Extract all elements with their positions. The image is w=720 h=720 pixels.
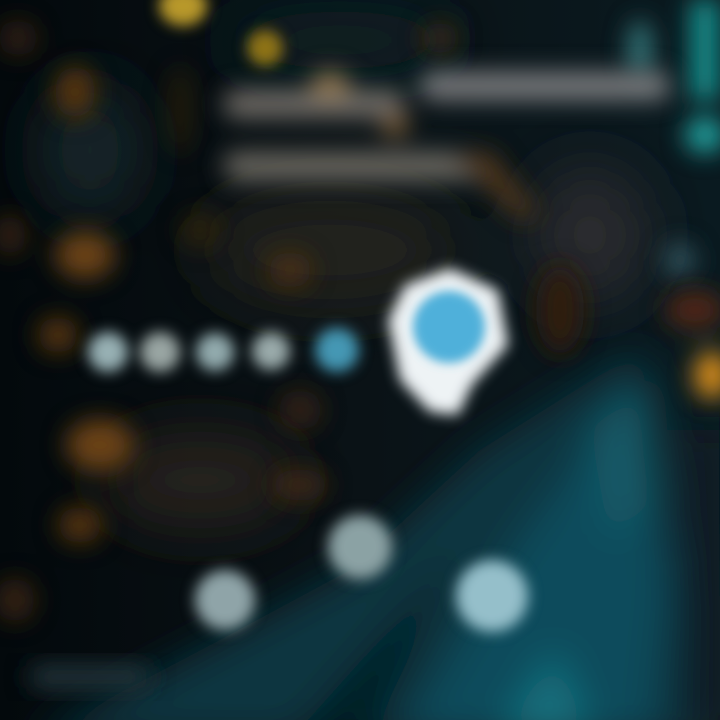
lower nodes <box>195 515 528 632</box>
panel: top-right teal glow <box>628 0 720 278</box>
icon: orange light at right edge <box>665 290 720 399</box>
panel: teal lower-right surface <box>30 350 720 720</box>
icon: top yellow lights <box>159 0 283 66</box>
heading: blurred title bars <box>224 71 670 220</box>
icon: map marker <box>388 268 508 415</box>
pagination dots <box>88 328 359 372</box>
panel: brown lights on the left <box>0 20 584 622</box>
footer: faint caption bar <box>30 665 150 689</box>
panel: central grey haze <box>40 10 650 530</box>
